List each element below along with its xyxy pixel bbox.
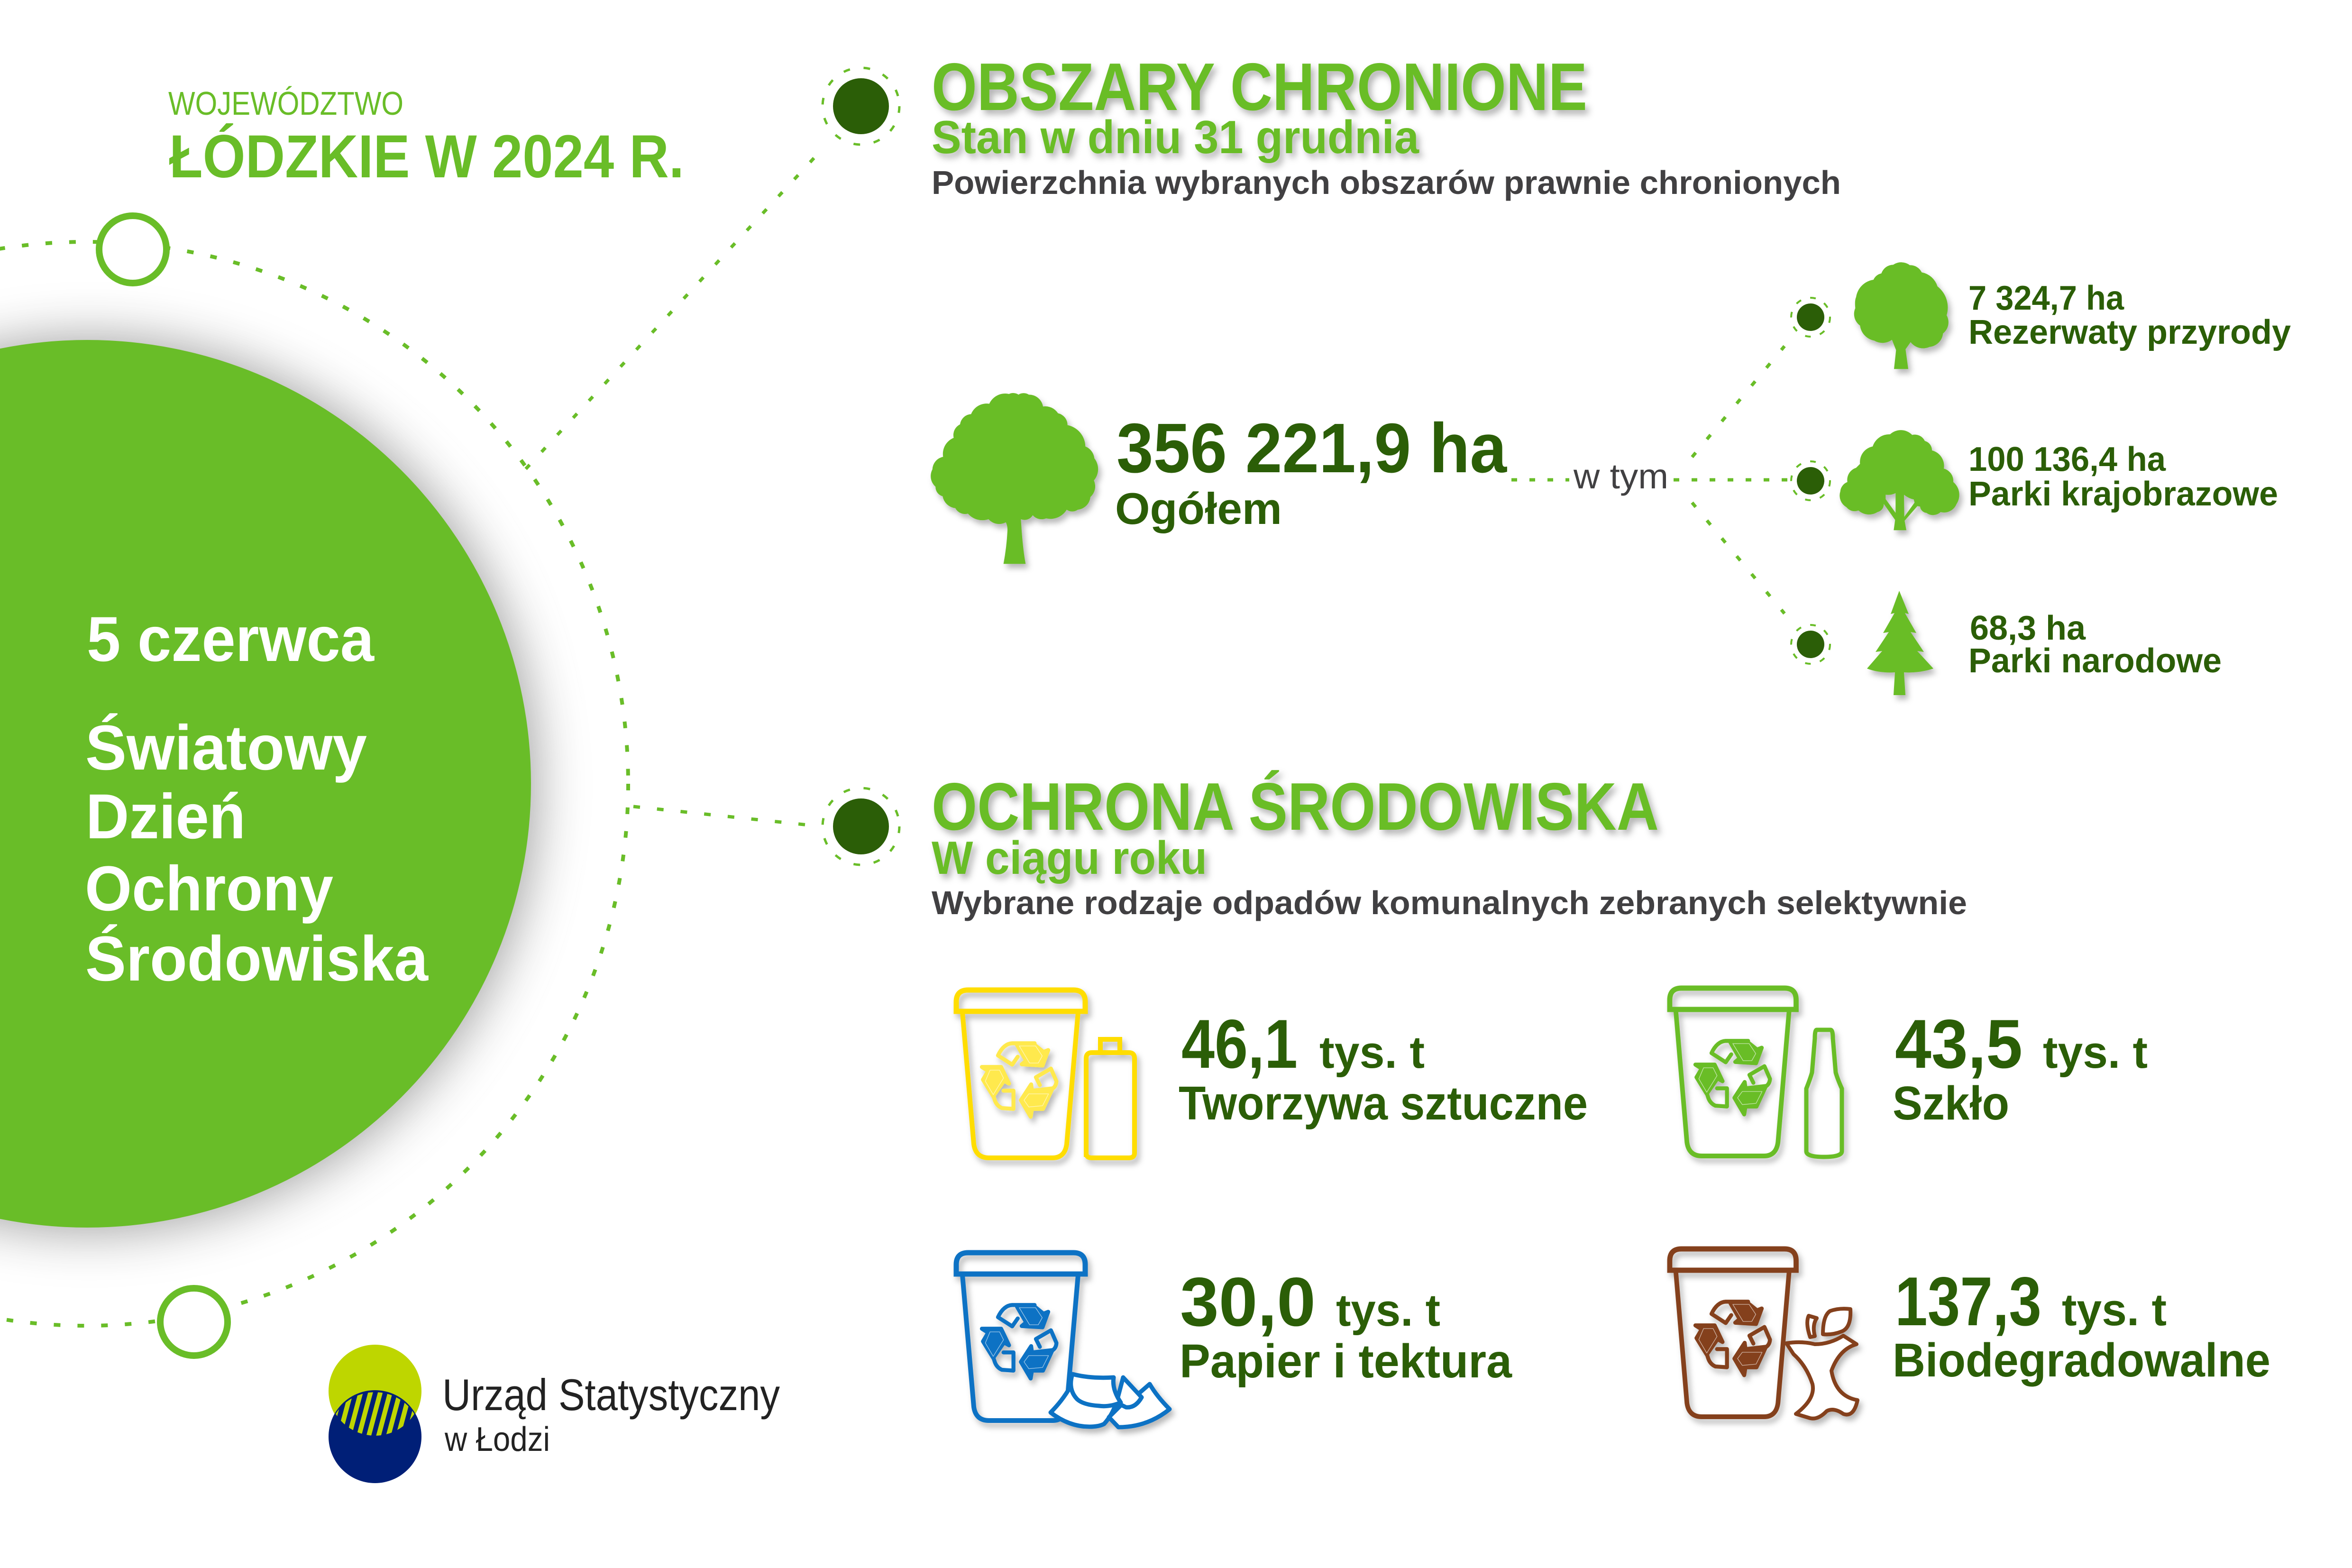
- text block: national parks: Parki narodowe: [1968, 642, 2222, 680]
- text block: glass: 43,5: [1895, 1005, 2023, 1082]
- heading: environmental protection: W ciągu roku: [932, 832, 1207, 884]
- panel: main green circle with shadow: [0, 339, 535, 1231]
- icon: landscape park tree: [1840, 430, 1959, 530]
- text block: biodegradable: tys. t: [2062, 1284, 2167, 1335]
- text block: plastics: [1179, 1005, 1588, 1130]
- text block: reserves: 7 324,7 ha: [1968, 279, 2124, 317]
- text block: glass: Szkło: [1893, 1077, 2009, 1130]
- heading: environmental protection: OCHRONA ŚRODOWISKA: [932, 769, 1659, 844]
- logo: Urząd Statystyczny w Łodzi: [329, 1345, 780, 1483]
- text block: plastics: Tworzywa sztuczne: [1179, 1077, 1588, 1130]
- text block: biodegradable: 137,3: [1895, 1263, 2041, 1340]
- icon: branch node 1: [1791, 298, 1830, 337]
- icon: ring node bottom: [160, 1288, 228, 1356]
- logo: Urząd Statystyczny w Łodzi: w Łodzi: [444, 1421, 550, 1458]
- text block: reserves: Rezerwaty przyrody: [1968, 313, 2291, 351]
- heading: protected areas: Powierzchnia wybranych obszarów prawnie chronionych: [932, 164, 1841, 201]
- text block: landscape parks: Parki krajobrazowe: [1968, 475, 2278, 513]
- text block: reserves: [1968, 279, 2291, 351]
- text block: circle title: 5 czerwca: [87, 604, 375, 675]
- text block: biodegradable: Biodegradowalne: [1893, 1334, 2270, 1387]
- logo: Urząd Statystyczny w Łodzi: Urząd Statystyczny: [442, 1370, 780, 1420]
- text block: landscape parks: [1968, 440, 2278, 513]
- text block: paper: Papier i tektura: [1180, 1335, 1512, 1388]
- icon: section node 2: [823, 788, 899, 865]
- heading: environmental protection: [932, 769, 1967, 921]
- heading: environmental protection: Wybrane rodzaje odpadów komunalnych zebranych selektywnie: [932, 884, 1967, 921]
- text block: national parks: 68,3 ha: [1970, 609, 2086, 647]
- heading: region: [168, 85, 684, 191]
- text block: total area: 356 221,9 ha: [1117, 409, 1508, 487]
- text block: national parks: [1968, 609, 2222, 680]
- text block: landscape parks: 100 136,4 ha: [1968, 440, 2166, 478]
- text block: glass: [1893, 1005, 2148, 1130]
- text block: paper: 30,0: [1180, 1263, 1316, 1340]
- icon: blue bin with paper: [956, 1253, 1170, 1427]
- icon: ring node top: [99, 216, 166, 283]
- text block: circle title: [85, 604, 429, 994]
- text block: total area: Ogółem: [1115, 484, 1282, 533]
- label: w tym: w tym: [1573, 457, 1668, 496]
- text block: glass: tys. t: [2043, 1027, 2148, 1078]
- heading: protected areas: Stan w dniu 31 grudnia: [932, 111, 1419, 163]
- text block: circle title: Środowiska: [85, 924, 429, 994]
- icon: branch node 2: [1791, 461, 1830, 500]
- text block: plastics: tys. t: [1319, 1027, 1425, 1078]
- icon: section node 1: [823, 68, 899, 145]
- heading: region: WOJEWÓDZTWO: [168, 85, 403, 122]
- icon: pine tree: [1867, 591, 1933, 695]
- heading: region: ŁÓDZKIE W 2024 R.: [169, 123, 684, 191]
- text block: circle title: Światowy: [85, 713, 367, 783]
- heading: protected areas: OBSZARY CHRONIONE: [932, 49, 1587, 125]
- icon: yellow bin with bottle: [956, 990, 1135, 1158]
- dotted connector network: [0, 150, 1797, 1326]
- text block: biodegradable: [1893, 1263, 2270, 1387]
- text block: circle title: Dzień: [86, 781, 246, 852]
- text block: total area: [1115, 409, 1508, 533]
- icon: brown bin with apple core: [1670, 1249, 1858, 1419]
- icon: branch node 3: [1791, 625, 1830, 664]
- text block: circle title: Ochrony: [85, 853, 333, 924]
- text block: plastics: 46,1: [1181, 1005, 1298, 1082]
- text block: paper: [1180, 1263, 1512, 1388]
- icon: green bin with glass bottle: [1670, 988, 1842, 1157]
- text block: paper: tys. t: [1336, 1285, 1440, 1336]
- icon: large tree: [931, 393, 1098, 564]
- heading: protected areas: [932, 49, 1841, 201]
- icon: reserve tree: [1854, 262, 1949, 369]
